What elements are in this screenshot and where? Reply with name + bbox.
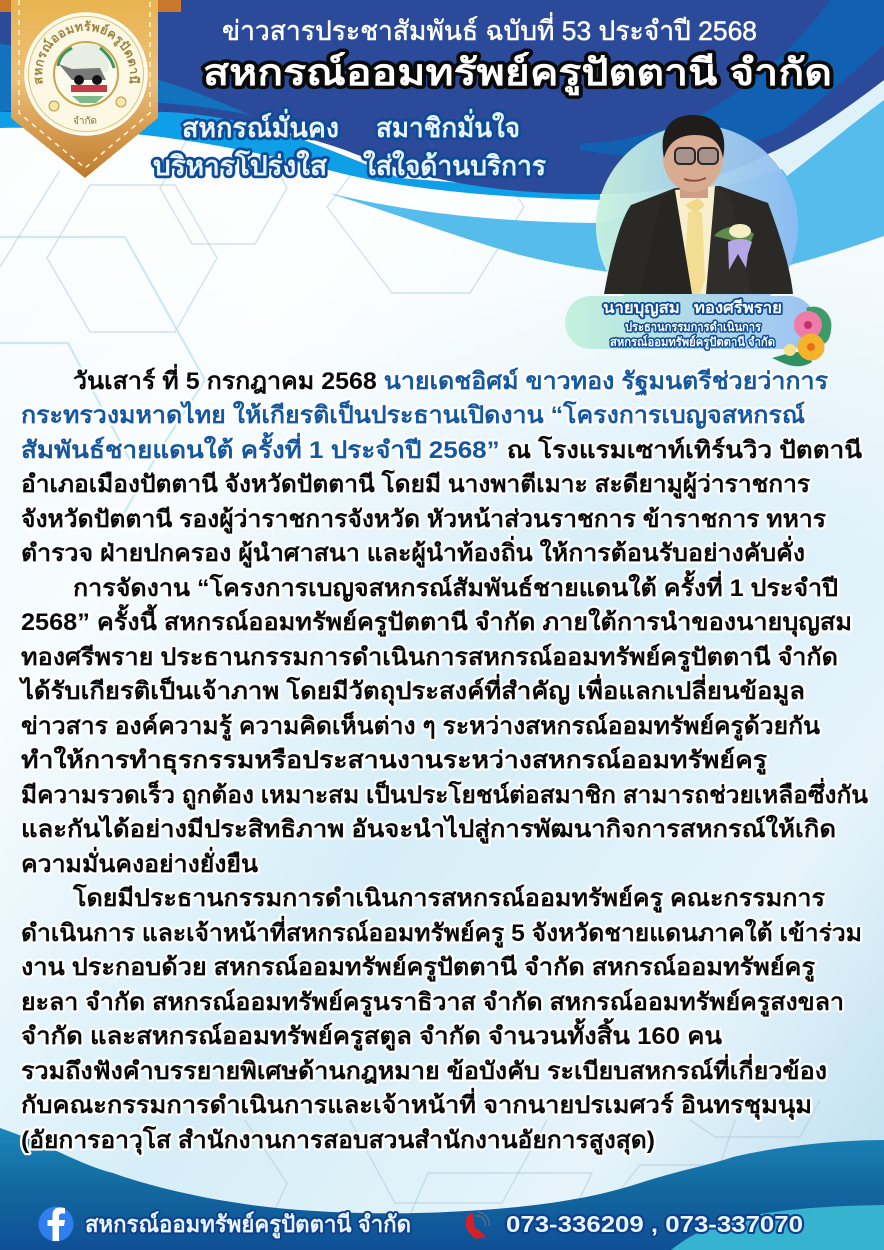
header wave: dark navy bbox=[0, 0, 884, 194]
footer phone numbers: 073-336209 , 073-337070 bbox=[506, 1211, 803, 1237]
body: paragraph 1: สัมพันธ์ชายแดนใต้ ครั้งที่ 1 ประจำปี 2568” ณ โรงแรมเซาท์เทิร์นวิว ปัตตานี bbox=[21, 431, 863, 464]
icon: facebook bbox=[38, 1206, 74, 1242]
body: paragraph 1: อำเภอเมืองปัตตานี จังหวัดปัตตานี โดยมี นางพาตีเมาะ สะดียามูผู้ว่าราชการ bbox=[21, 469, 810, 499]
body: paragraph 2: ได้รับเกียรติเป็นเจ้าภาพ โดยมีวัตถุประสงค์ที่สำคัญ เพื่อแลกเปลี่ยนข้อมูล bbox=[18, 673, 805, 707]
body: paragraph 3 bbox=[21, 883, 862, 1156]
body: paragraph 3: โดยมีประธานกรรมการดำเนินการสหกรณ์ออมทรัพย์ครู คณะกรรมการ bbox=[72, 883, 825, 913]
slogans bbox=[153, 108, 546, 181]
header wave: medium blue left bbox=[0, 44, 250, 115]
body: paragraph 3: ยะลา จำกัด สหกรณ์ออมทรัพย์ครูนราธิวาส จำกัด สหกรณ์ออมทรัพย์ครูสงขลา bbox=[21, 988, 844, 1017]
body: paragraph 2: มีความรวดเร็ว ถูกต้อง เหมาะสม เป็นประโยชน์ต่อสมาชิก สามารถช่วยเหลือซึ่งกัน bbox=[21, 777, 869, 810]
body: paragraph 3: (อัยการอาวุโส สำนักงานการสอบสวนสำนักงานอัยการสูงสุด) bbox=[21, 1125, 655, 1156]
name plate: สหกรณ์ออมทรัพย์ครูปัตตานี จำกัด bbox=[610, 335, 775, 350]
name plate: นายบุญสม ทองศรีพราย bbox=[603, 298, 782, 318]
icon: telephone bbox=[466, 1212, 489, 1239]
header wave: right pale band bbox=[770, 78, 884, 176]
gold badge with emblem bbox=[11, 0, 158, 178]
gold badge with emblem: สหกรณ์ออมทรัพย์ครูปัตตานี bbox=[34, 20, 140, 84]
footer wave bbox=[0, 1128, 884, 1250]
body: paragraph 1: ตำรวจ ฝ่ายปกครอง ผู้นำศาสนา และผู้นำท้องถิ่น ให้การต้อนรับอย่างคับคั่ง bbox=[21, 535, 805, 568]
slogans: บริหารโปร่งใส bbox=[153, 149, 328, 181]
body: paragraph 2: การจัดงาน “โครงการเบญจสหกรณ์สัมพันธ์ชายแดนใต้ ครั้งที่ 1 ประจำปี bbox=[73, 569, 838, 602]
body: paragraph 1 bbox=[21, 363, 863, 568]
body: paragraph 3: กับคณะกรรมการดำเนินการและเจ้าหน้าที่ จากนายปรเมศวร์ อินทรชุมนุม bbox=[21, 1087, 812, 1121]
header wave: light blue swoosh and right field bbox=[328, 100, 884, 277]
name plate: ประธานกรรมการดำเนินการ bbox=[625, 320, 762, 334]
portrait circle bbox=[596, 125, 798, 327]
body: paragraph 2: 2568” ครั้งนี้ สหกรณ์ออมทรัพย์ครูปัตตานี จำกัด ภายใต้การนำของนายบุญสม bbox=[21, 603, 852, 638]
slogans: สมาชิกมั่นใจ bbox=[376, 108, 520, 143]
body: paragraph 3: งาน ประกอบด้วย สหกรณ์ออมทรัพย์ครูปัตตานี จำกัด สหกรณ์ออมทรัพย์ครู bbox=[21, 953, 815, 982]
body: paragraph 1: กระทรวงมหาดไทย ให้เกียรติเป็นประธานเปิดงาน “โครงการเบญจสหกรณ์ bbox=[21, 400, 805, 429]
body: paragraph 2: ทำให้การทำธุรกรรมหรือประสานงานระหว่างสหกรณ์ออมทรัพย์ครู bbox=[21, 745, 767, 776]
name plate bbox=[565, 296, 815, 350]
gold badge with emblem: จำกัด bbox=[73, 116, 97, 127]
body: paragraph 3: รวมถึงฟังคำบรรยายพิเศษด้านกฎหมาย ข้อบังคับ ระเบียบสหกรณ์ที่เกี่ยวข้อง bbox=[21, 1053, 827, 1085]
header wave: bright blue band bbox=[0, 95, 600, 200]
body: paragraph 2: ทองศรีพราย ประธานกรรมการดำเนินการสหกรณ์ออมทรัพย์ครูปัตตานี จำกัด bbox=[21, 643, 838, 672]
body: paragraph 1: จังหวัดปัตตานี รองผู้ว่าราชการจังหวัด หัวหน้าส่วนราชการ ข้าราชการ ทหาร bbox=[21, 506, 826, 534]
body: paragraph 3: จำกัด และสหกรณ์ออมทรัพย์ครูสตูล จำกัด จำนวนทั้งสิ้น 160 คน bbox=[21, 1017, 723, 1051]
body: paragraph 2: ความมั่นคงอย่างยั่งยืน bbox=[21, 846, 259, 878]
slogans: สหกรณ์มั่นคง bbox=[182, 108, 339, 143]
organisation title: สหกรณ์ออมทรัพย์ครูปัตตานี จำกัด bbox=[203, 52, 832, 96]
body: paragraph 2: ข่าวสาร องค์ความรู้ ความคิดเห็นต่าง ๆ ระหว่างสหกรณ์ออมทรัพย์ครูด้วยกัน bbox=[21, 711, 821, 741]
header wave: medium blue right bbox=[580, 0, 884, 157]
icon: tropical flowers bbox=[772, 307, 831, 366]
badge ribbon bbox=[0, 0, 181, 12]
slogans: ใส่ใจด้านบริการ bbox=[363, 150, 546, 181]
body: paragraph 1: วันเสาร์ ที่ 5 กรกฎาคม 2568 นายเดชอิศม์ ขาวทอง รัฐมนตรีช่วยว่าการ bbox=[73, 363, 828, 397]
portrait: president bbox=[604, 115, 793, 294]
newsletter issue line: ข่าวสารประชาสัมพันธ์ ฉบับที่ 53 ประจำปี 2568 bbox=[222, 12, 757, 46]
body: paragraph 3: ดำเนินการ และเจ้าหน้าที่สหกรณ์ออมทรัพย์ครู 5 จังหวัดชายแดนภาคใต้ เข้าร่วม bbox=[21, 915, 862, 948]
footer organisation name: สหกรณ์ออมทรัพย์ครูปัตตานี จำกัด bbox=[85, 1211, 411, 1239]
body: paragraph 2 bbox=[18, 569, 869, 878]
body: paragraph 2: และกันได้อย่างมีประสิทธิภาพ อันจะนำไปสู่การพัฒนากิจการสหกรณ์ให้เกิด bbox=[21, 814, 836, 844]
footer teal corner bbox=[671, 1205, 884, 1250]
